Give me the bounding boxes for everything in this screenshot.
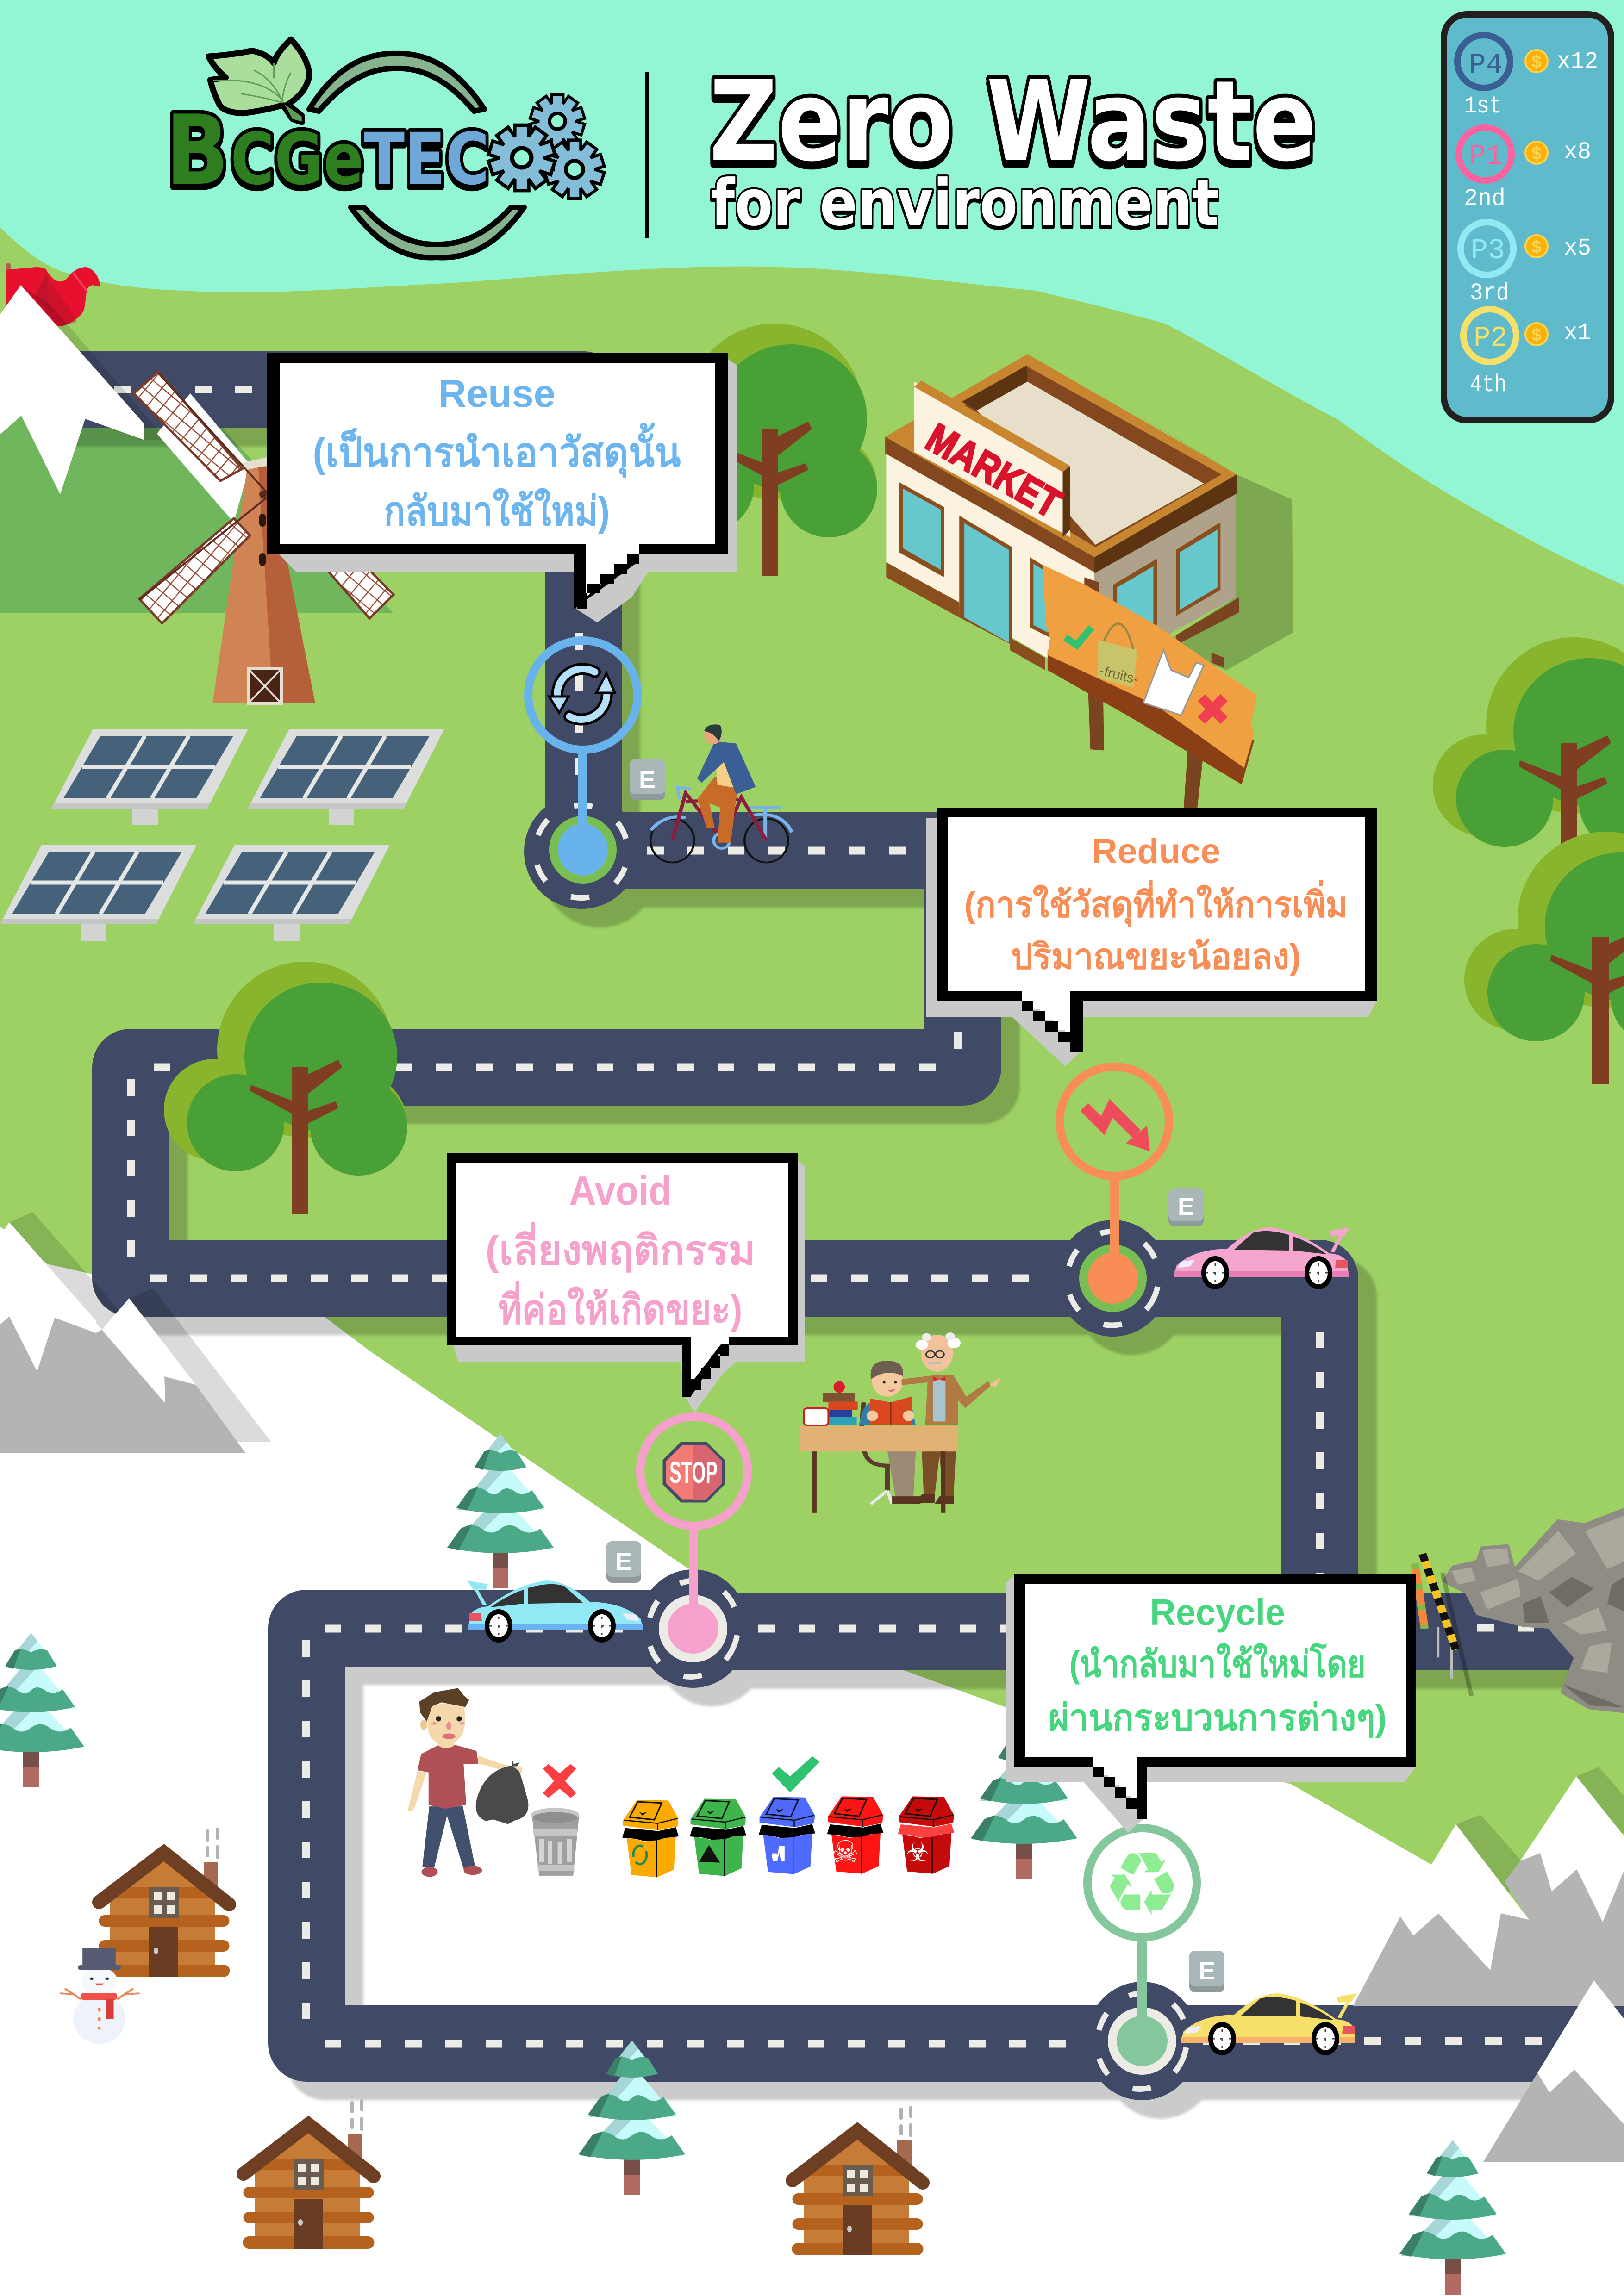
rank 1 P4: 1st [1464, 93, 1502, 120]
red cross over bin [543, 1764, 576, 1798]
icon stop sign [664, 1444, 723, 1501]
pin reuse [528, 641, 637, 876]
E key avoid [606, 1541, 641, 1583]
callout avoid: (เลี่ยงพฤติกรรม [485, 1222, 756, 1273]
E key recycle [1189, 1951, 1224, 1992]
sorting bins [622, 1796, 954, 1877]
callout avoid [447, 1153, 805, 1412]
pine trees [0, 1434, 1506, 2295]
rank 4 P2: 4th [1470, 371, 1506, 398]
roundabout reduce [1054, 1219, 1172, 1338]
green mountain top left [0, 324, 394, 613]
callout reduce: ปริมาณขยะน้อยลง) [1011, 937, 1301, 977]
callout reuse: กลับมาใช้ใหม่) [384, 488, 610, 534]
E key reuse [630, 759, 665, 800]
tree top centre [634, 324, 877, 576]
rank 2 P1: P1 [1469, 140, 1503, 173]
rank 4 P2: P2 [1474, 322, 1507, 355]
callout reuse [267, 353, 737, 622]
callout avoid: Avoid [569, 1168, 671, 1213]
rank 1 P4: x12 [1557, 48, 1598, 75]
icon reuse arrows [549, 669, 615, 719]
pin avoid [640, 1417, 748, 1654]
roundabout recycle [1084, 1980, 1200, 2102]
rank 1 P4 [1457, 35, 1598, 120]
mountain bottom left [0, 1212, 271, 1453]
rank 3 P3: 3rd [1470, 280, 1509, 307]
market sign text: MARKET [919, 414, 1069, 527]
header divider [645, 72, 649, 238]
icon stop sign: STOP [669, 1455, 718, 1489]
callout recycle [1006, 1574, 1416, 1833]
windmill [134, 372, 394, 703]
tree right upper [1433, 637, 1624, 890]
bin biohazard icon: ☣ [906, 1836, 930, 1868]
market building [885, 354, 1293, 685]
rank 1 P4: $ [1531, 52, 1542, 72]
tree right lower [1464, 832, 1624, 1084]
road lane markings [114, 390, 1544, 2044]
logo BcGeTEC [166, 39, 602, 258]
logo gears [491, 96, 602, 197]
logo wordmark: CGe [231, 118, 364, 201]
title: Zero Waste [709, 56, 1317, 186]
rank 4 P2: x1 [1564, 319, 1591, 347]
solar panels [0, 729, 444, 941]
wooden sign reusable bag [1043, 565, 1257, 808]
logo lower arc [351, 207, 524, 258]
icon reduce arrow [1084, 1107, 1150, 1151]
rank 2 P1 [1459, 128, 1591, 212]
logo leaf [209, 39, 309, 122]
teacher and student at desk [799, 1332, 1001, 1513]
subtitle: for environment [711, 166, 1219, 240]
red flag [6, 263, 100, 326]
callout recycle: Recycle [1150, 1592, 1285, 1633]
cyclist [650, 724, 792, 863]
roundabout reuse [522, 792, 641, 911]
green land [0, 227, 1624, 2036]
houses [98, 1828, 923, 2255]
rank 3 P3: P3 [1471, 234, 1505, 267]
rank 2 P1: 2nd [1464, 185, 1505, 212]
general trash can [531, 1808, 579, 1876]
roundabout avoid [635, 1568, 751, 1690]
callout recycle: ผ่านกระบวนการต่างๆ) [1048, 1697, 1387, 1738]
E key recycle: E [1199, 1957, 1215, 1985]
snowman [60, 1948, 140, 2044]
bin skull icon: ☠ [831, 1834, 859, 1870]
snow field [0, 1226, 1624, 2296]
callout reduce [926, 808, 1377, 1066]
person disposing trash [407, 1688, 528, 1877]
rank 1 P4: P4 [1469, 49, 1503, 81]
mountains bottom right [1353, 1767, 1624, 2162]
logo upper arc [309, 54, 484, 111]
car pink [1174, 1227, 1350, 1289]
tree centre left [164, 962, 407, 1214]
E key reuse: E [639, 766, 656, 794]
road barrier [1415, 1554, 1471, 1696]
pin reduce [1060, 1067, 1169, 1304]
logo wordmark: TEC [364, 118, 489, 201]
callout reduce: (การใช้วัสดุที่ทำให้การเพิ่ม [964, 880, 1348, 927]
winding road [46, 390, 1624, 2100]
E key reduce [1168, 1188, 1204, 1226]
callout reduce: Reduce [1092, 832, 1220, 871]
rank 2 P1: $ [1531, 144, 1542, 163]
car yellow [1181, 1993, 1357, 2055]
E key reduce: E [1178, 1193, 1194, 1220]
callout recycle: (นำกลับมาใช้ใหม่โดย [1069, 1642, 1366, 1685]
mountain top left [0, 285, 250, 523]
car blue [467, 1580, 643, 1643]
logo wordmark: B [166, 95, 229, 207]
rank 2 P1: x8 [1564, 138, 1591, 166]
rank 4 P2: $ [1531, 325, 1542, 345]
bag label: -fruits- [1098, 663, 1140, 687]
rank 4 P2 [1463, 309, 1591, 398]
rank 3 P3: $ [1531, 237, 1542, 257]
rank 3 P3 [1461, 222, 1591, 307]
rank 3 P3: x5 [1564, 235, 1591, 262]
pin recycle [1087, 1828, 1197, 2066]
icon recycle: ♻ [1103, 1833, 1181, 1935]
E key avoid: E [615, 1548, 632, 1575]
green check over blue bin [772, 1756, 820, 1792]
logo wordmark [166, 95, 489, 207]
leaderboard panel [1444, 14, 1611, 420]
callout reuse: Reuse [438, 372, 556, 415]
callout reuse: (เป็นการนำเอาวัสดุนั้น [313, 423, 681, 478]
rock pile [1445, 1510, 1624, 1711]
road shadow [65, 408, 1624, 2119]
callout avoid: ที่ค่อให้เกิดขยะ) [498, 1281, 743, 1332]
